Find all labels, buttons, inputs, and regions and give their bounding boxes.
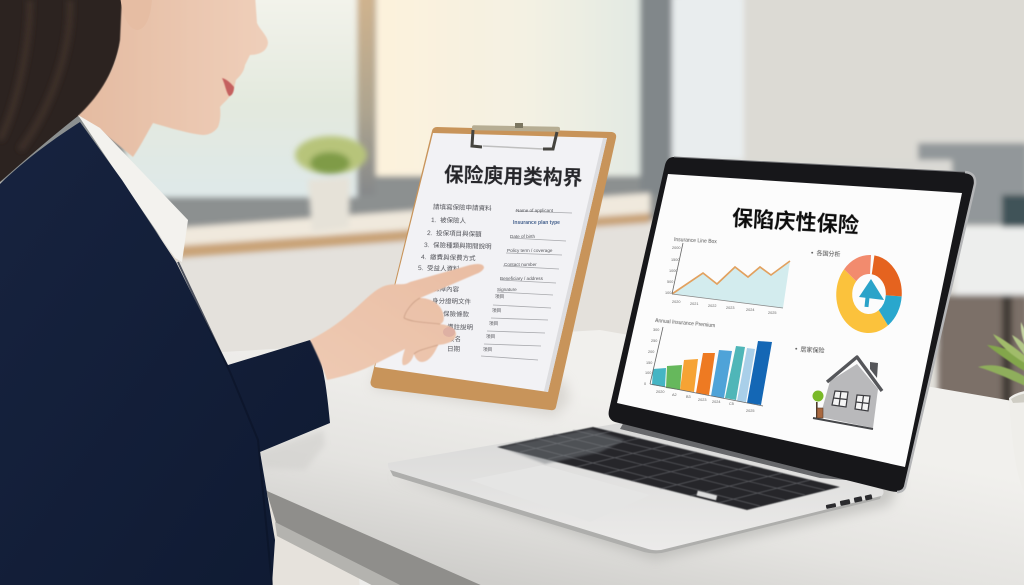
donut centre arrow icon <box>859 279 884 307</box>
clipboard right form: Insurance plan type <box>513 220 560 226</box>
clipboard right form: 項目 <box>486 334 495 340</box>
clipboard right form: Name of applicant <box>516 208 554 213</box>
screen bar chart: 150 <box>646 361 652 365</box>
screen line chart: 2024 <box>746 308 754 312</box>
ports <box>826 494 873 509</box>
clipboard board <box>370 127 616 410</box>
screen title: 保陷庆性保险 <box>731 205 860 238</box>
hand <box>310 264 484 380</box>
screen bar chart: B3 <box>686 395 691 399</box>
screen line chart: 2022 <box>708 304 716 308</box>
wall and table leg below table <box>270 500 500 585</box>
background plant on sill <box>295 136 367 232</box>
clipboard right form: Policy term / coverage <box>507 248 553 253</box>
clipboard right form: Signature <box>497 287 517 292</box>
clipboard left list: 4. 繳費與保費方式 <box>421 252 476 262</box>
clipboard left list: 保障內容 <box>433 284 460 294</box>
screen line chart: 500 <box>667 280 673 284</box>
screen line chart: 2021 <box>690 302 698 306</box>
screen bar chart: 2023 <box>698 398 706 402</box>
hinge <box>620 420 847 480</box>
screen label two: • 居家保险 <box>795 345 825 355</box>
icon: house <box>812 357 882 429</box>
screen bar chart <box>644 318 772 413</box>
white collar <box>78 115 188 262</box>
clipboard right form: 項目 <box>489 321 498 327</box>
clipboard left list: 2. 投保項目與保額 <box>427 228 482 238</box>
screen line chart: 2023 <box>726 306 734 310</box>
table <box>222 330 1024 585</box>
lips <box>222 78 234 96</box>
clipboard <box>370 123 616 416</box>
screen line chart: 2025 <box>768 311 776 315</box>
screen bar chart: 250 <box>651 339 657 343</box>
woman <box>0 0 484 585</box>
clipboard left list: 身分證明文件 <box>432 296 472 306</box>
keyboard <box>497 427 840 510</box>
clipboard left list: 1. 被保險人 <box>431 215 467 225</box>
screen label one: • 各国分析 <box>811 249 841 259</box>
clipboard right form: 項目 <box>495 294 504 300</box>
screen bar chart: 100 <box>645 371 651 375</box>
laptop lid bezel <box>609 157 975 492</box>
neck and face <box>78 0 268 157</box>
hair <box>0 0 128 182</box>
trackpad <box>470 465 650 522</box>
clipboard right form: Beneficiary / address <box>500 276 544 281</box>
laptop base <box>388 422 884 552</box>
clipboard left list: 3. 保險種類與期間說明 <box>424 240 492 251</box>
clipboard left list: 備註說明 <box>447 322 474 332</box>
clipboard paper <box>375 133 607 392</box>
screen bar chart: 200 <box>648 350 654 354</box>
screen bar chart: Annual Insurance Premium <box>655 318 715 329</box>
clipboard right form <box>481 208 572 360</box>
clipboard right form: Date of birth <box>510 234 535 239</box>
clipboard title: 保险庾用类构界 <box>444 163 583 190</box>
screen donut chart <box>843 263 895 325</box>
clipboard left list: 日期 <box>447 345 461 353</box>
screen bar chart: 2025 <box>746 409 754 413</box>
screen line chart: 100 <box>665 291 671 295</box>
laptop shadow <box>392 476 900 560</box>
screen line chart <box>665 237 790 315</box>
screen bar chart: C5 <box>729 402 734 406</box>
screen bar chart: 2024 <box>712 400 720 404</box>
screen line chart: 1500 <box>671 258 679 262</box>
right side plant and pot <box>978 322 1024 500</box>
clipboard left list: 簽名 <box>448 334 461 343</box>
clipboard right form: 項目 <box>483 347 492 353</box>
screen line chart: Insurance Line Box <box>674 237 717 245</box>
jacket <box>0 122 330 585</box>
laptop <box>388 157 975 560</box>
screen bar chart: A2 <box>672 393 677 397</box>
clipboard left list: 請填寫保險申請資料 <box>433 202 492 213</box>
metal clip <box>472 123 560 149</box>
screen bar chart: 0 <box>644 382 646 386</box>
laptop screen <box>617 174 962 467</box>
clipboard left list: 5. 受益人資料 <box>418 263 460 273</box>
clipboard shadow <box>372 360 570 416</box>
screen line chart: 2020 <box>672 300 680 304</box>
clipboard left list <box>418 202 492 353</box>
clipboard left list: 保險條款 <box>443 309 470 319</box>
screen bar chart: 300 <box>653 328 659 332</box>
screen line chart: 2000 <box>672 246 680 250</box>
screen line chart: 1000 <box>669 269 677 273</box>
screen bar chart: 2020 <box>656 390 664 394</box>
ear <box>120 0 152 30</box>
clipboard right form: Contact number <box>504 262 537 267</box>
clipboard right form: 項目 <box>492 308 501 314</box>
